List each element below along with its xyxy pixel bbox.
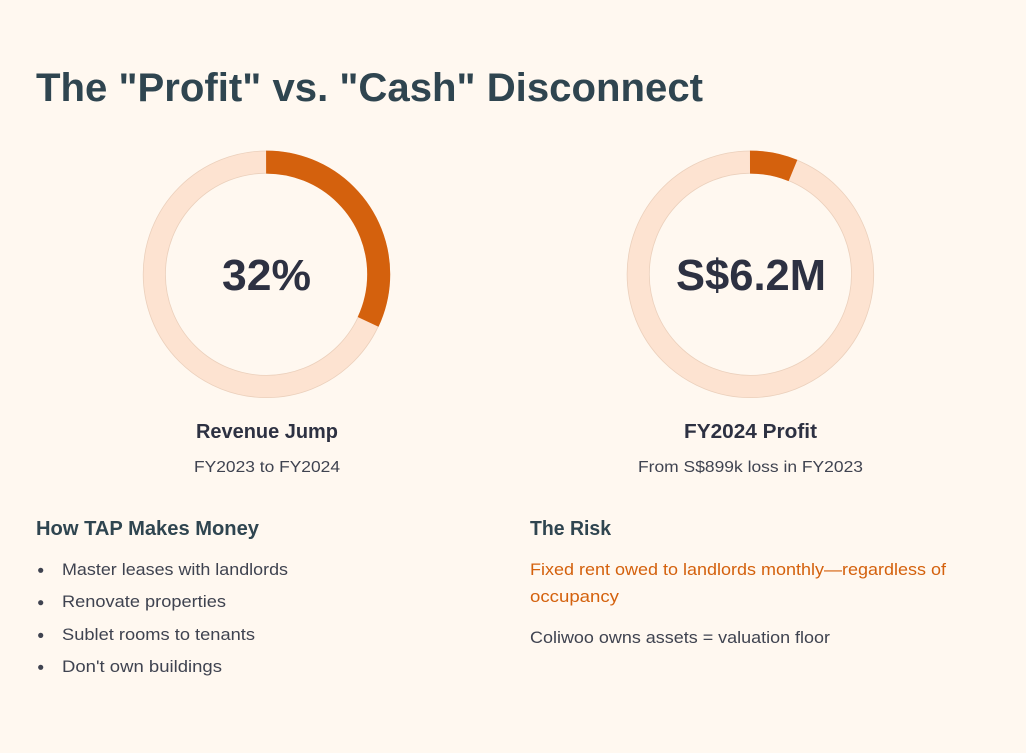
bullet list: Renovate properties bbox=[62, 593, 226, 611]
bullet list: Sublet rooms to tenants bbox=[62, 626, 255, 644]
title: The "Profit" vs. "Cash" Disconnect bbox=[36, 66, 703, 110]
donut chart: profit bbox=[627, 151, 874, 398]
metric value: 32%: 32% bbox=[222, 251, 311, 300]
metric label: FY2024 Profit bbox=[684, 421, 817, 443]
panel: revenue jump bbox=[143, 151, 390, 476]
panel: the risk bbox=[530, 518, 946, 647]
donut chart: 32% bbox=[143, 151, 390, 398]
metric sublabel: FY2023 to FY2024 bbox=[194, 459, 340, 476]
heading: The Risk bbox=[530, 518, 612, 540]
risk note: Coliwoo owns assets = valuation floor bbox=[530, 629, 831, 647]
risk highlight text: occupancy bbox=[530, 588, 620, 606]
risk highlight text: Fixed rent owed to landlords monthly—regardless of bbox=[530, 561, 946, 579]
metric value: S$6.2M: S$6.2M bbox=[676, 251, 826, 300]
bullet list: Don't own buildings bbox=[62, 658, 222, 676]
panel: FY2024 profit bbox=[627, 151, 874, 476]
bullet list: Master leases with landlords bbox=[62, 561, 288, 579]
metric label: Revenue Jump bbox=[196, 421, 338, 443]
panel: how TAP makes money bbox=[36, 518, 288, 676]
heading: How TAP Makes Money bbox=[36, 518, 260, 540]
bullet list bbox=[38, 561, 288, 676]
risk highlight text bbox=[530, 561, 946, 606]
metric sublabel: From S$899k loss in FY2023 bbox=[638, 459, 863, 476]
